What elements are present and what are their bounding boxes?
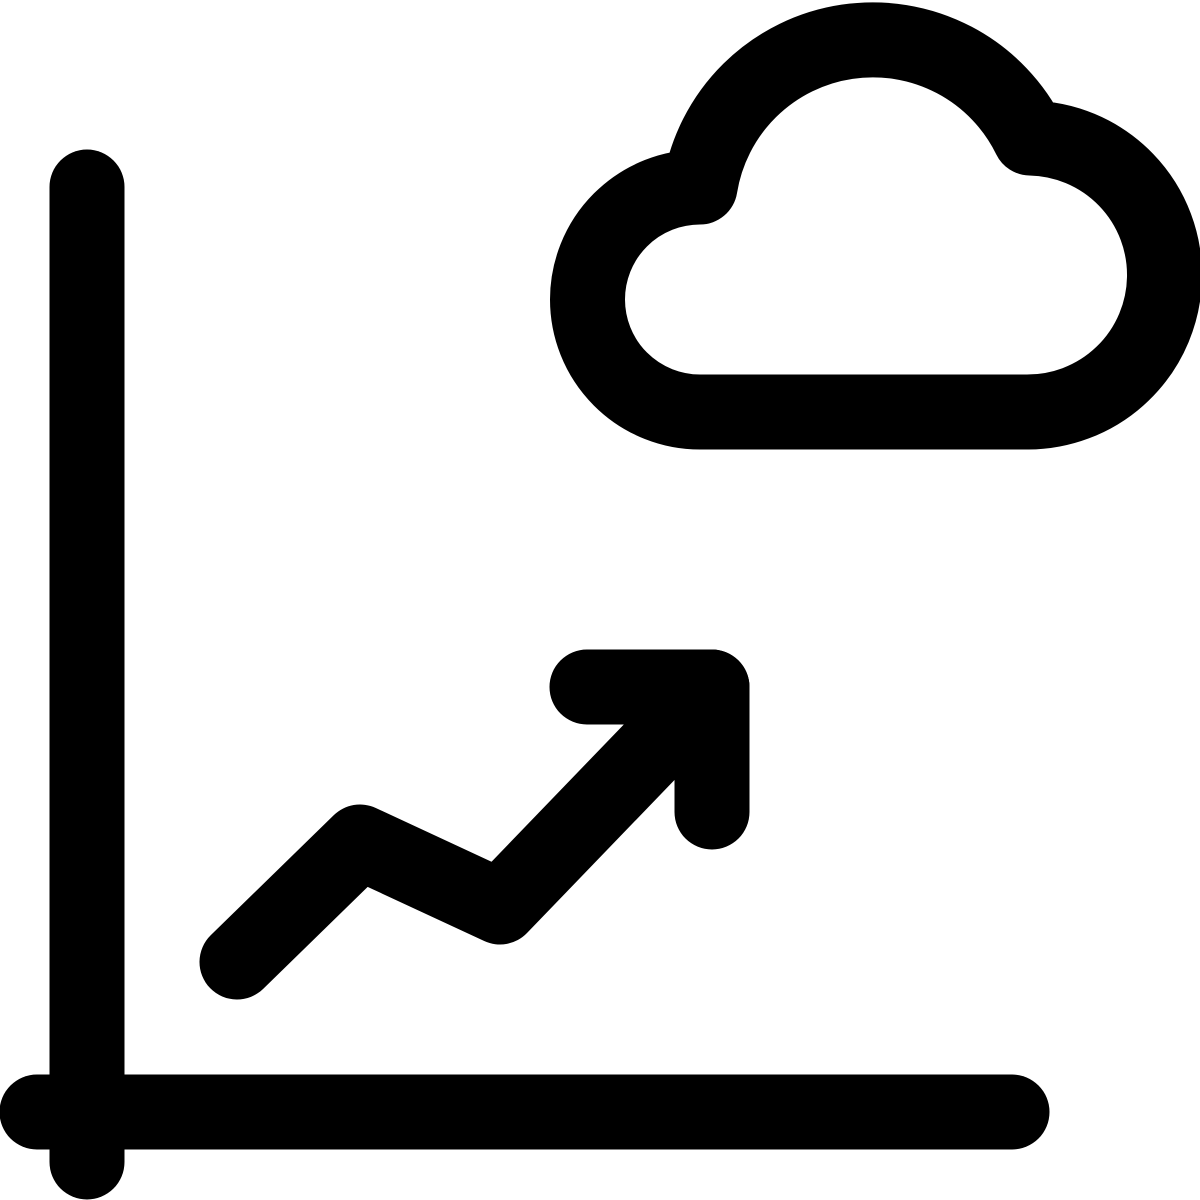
cloud bbox=[588, 40, 1165, 412]
chart axes bbox=[37, 187, 1012, 1162]
trend arrow bbox=[237, 687, 712, 962]
